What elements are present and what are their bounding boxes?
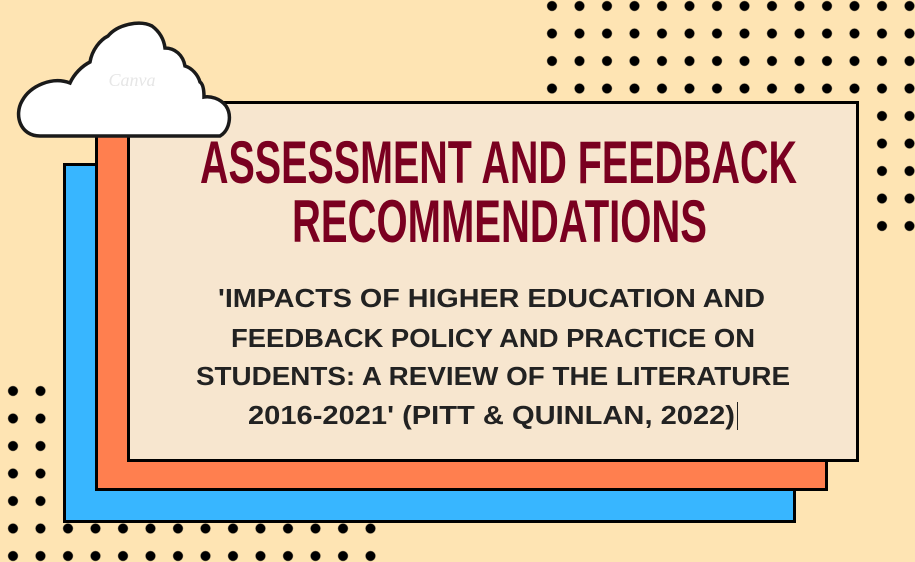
icon: cloud — [19, 23, 229, 136]
dot pattern top-right — [540, 0, 915, 235]
subtitle: citation — [196, 283, 790, 430]
subtitle: citation: FEEDBACK POLICY AND PRACTICE ON — [231, 323, 755, 353]
title: RECOMMENDATIONS — [292, 188, 707, 255]
panel: blue back layer — [64, 164, 794, 522]
panel: orange middle layer — [96, 132, 826, 490]
dot pattern bottom-left — [0, 378, 385, 562]
subtitle: citation: 'IMPACTS OF HIGHER EDUCATION AND — [218, 283, 765, 313]
icon: cloud: Canva — [108, 70, 156, 90]
subtitle: citation: STUDENTS: A REVIEW OF THE LITERATURE — [196, 361, 790, 391]
title — [200, 129, 797, 255]
subtitle: citation: 2016-2021' (PITT & QUINLAN, 2022) — [248, 400, 735, 430]
panel: cream front card — [128, 102, 858, 460]
